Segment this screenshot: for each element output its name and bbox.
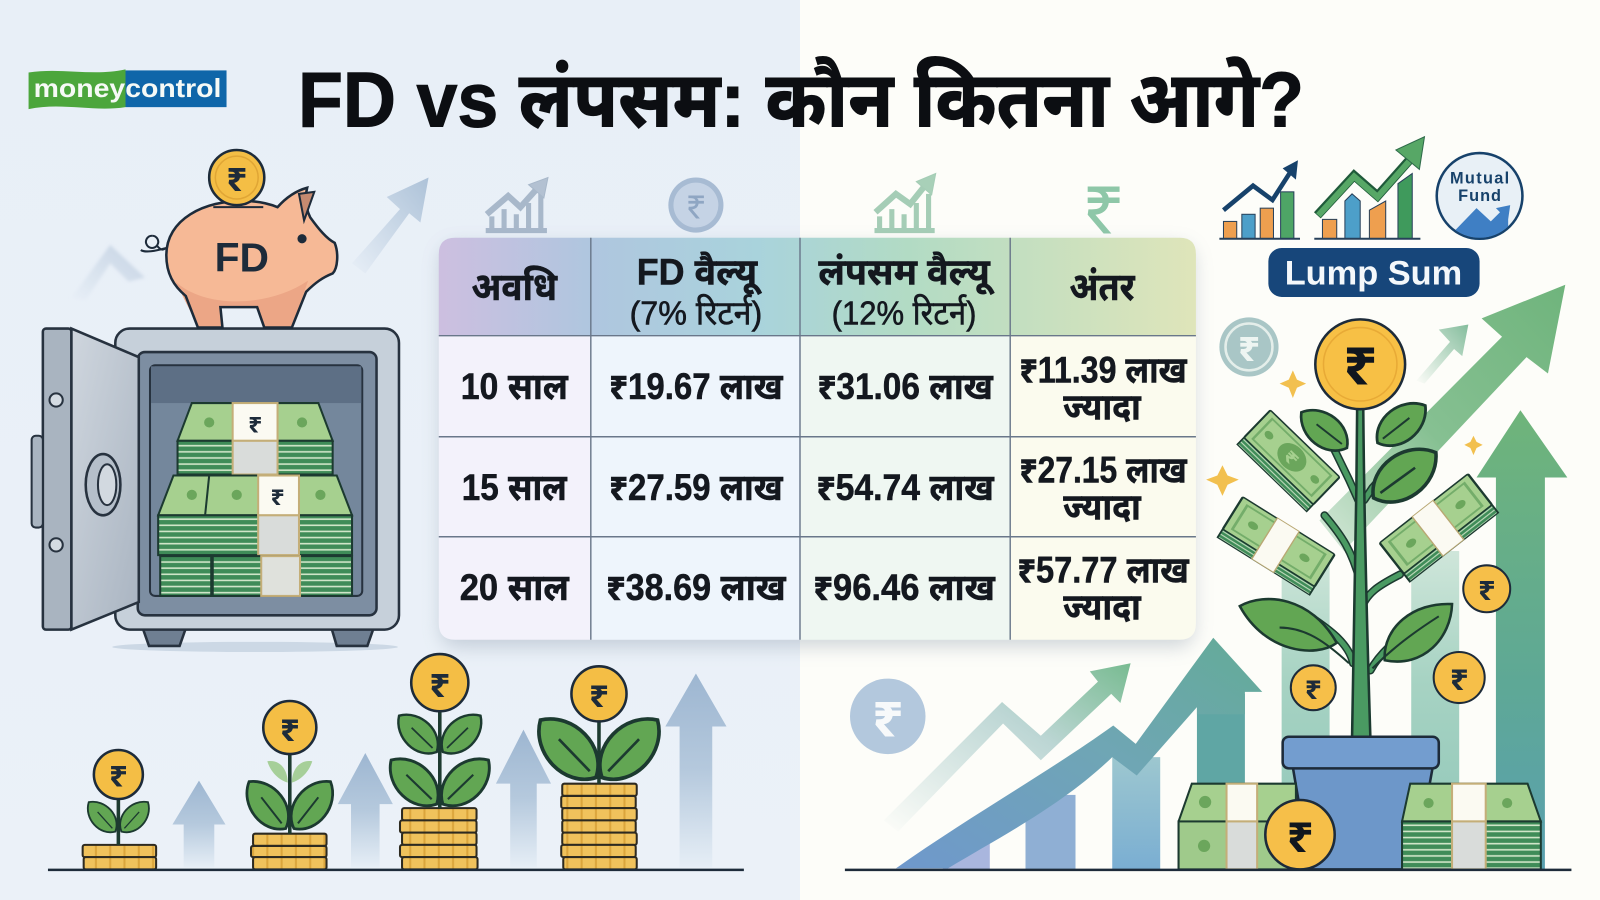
plant 3: coins and plant: ₹	[429, 664, 450, 705]
icon: faint chart FD column	[486, 178, 548, 231]
growth arrows left	[172, 673, 727, 867]
arrow: small diagonal	[1416, 324, 1468, 384]
small rupee coins: ₹	[1287, 810, 1313, 862]
header labels	[471, 251, 1135, 332]
header labels: अवधि	[471, 265, 558, 309]
logo: moneycontrol: moneycontrol	[34, 75, 221, 103]
baseline right	[845, 869, 1571, 871]
table header row	[439, 238, 1196, 336]
arrow: large diagonal	[1319, 285, 1565, 551]
row: 20 years: ज्यादा	[1063, 586, 1142, 627]
illustration: money plant	[1179, 319, 1541, 869]
table	[439, 238, 1196, 647]
header labels: FD वैल्यू	[637, 251, 762, 295]
icon: mutual fund badge: Mutual	[1450, 170, 1509, 188]
background: left FD panel	[0, 0, 800, 900]
icon: chart with navy arrow	[1219, 160, 1300, 239]
arrow: main zigzag growth	[896, 638, 1262, 868]
plant 1: coins and small plant	[81, 750, 156, 869]
header labels: (12% रिटर्न)	[832, 293, 977, 332]
plant leaves	[1291, 400, 1357, 461]
icon: pale rupee coin lower right	[850, 679, 926, 754]
row: 15 years	[462, 450, 1187, 527]
header labels: लंपसम वैल्यू	[818, 251, 995, 295]
plant stem and branches	[1311, 434, 1416, 670]
plant 2: coins and plant: ₹	[280, 711, 300, 749]
icon: faint rupee symbol: ₹	[1082, 167, 1124, 251]
icon: chart with green arrow	[1314, 137, 1424, 239]
plant 2: coins and plant	[236, 701, 344, 869]
row: 15 years: 15 साल	[462, 467, 568, 508]
small rupee coins: ₹	[1305, 673, 1322, 706]
left background arrows	[71, 178, 429, 300]
small rupee coins: ₹	[1478, 573, 1495, 607]
header labels: (7% रिटर्न)	[630, 293, 762, 332]
plant 3: coins and plant	[379, 654, 501, 869]
background: right lump sum panel	[800, 0, 1600, 900]
baseline left	[48, 869, 744, 871]
chart: background bars	[943, 551, 1459, 869]
safe door	[32, 329, 139, 630]
big rupee coin on plant	[1315, 319, 1405, 409]
icon: coin above piggy: ₹	[226, 158, 247, 199]
row: 20 years: ₹38.69 लाख	[606, 567, 786, 608]
table shadow	[441, 245, 1194, 647]
illustration: money plant: ₹	[1343, 331, 1377, 398]
pot	[1283, 737, 1439, 869]
row: 15 years: ₹27.59 लाख	[609, 467, 783, 508]
row: 10 years: ₹19.67 लाख	[609, 366, 783, 407]
arrow: faint zigzag	[884, 663, 1131, 832]
cash stack right	[1402, 784, 1541, 869]
icon: faint rupee coin	[668, 178, 723, 233]
row: 20 years	[460, 550, 1190, 627]
row: 10 years: 10 साल	[461, 366, 569, 407]
safe body	[115, 329, 399, 630]
plant 4: coins and plant: ₹	[589, 677, 609, 715]
row: 20 years: 20 साल	[460, 567, 570, 608]
row: 10 years: ज्यादा	[1063, 386, 1142, 427]
small rupee coins: ₹	[1450, 660, 1469, 697]
icon: ghost rupee coin	[1219, 317, 1279, 377]
illustration: safe: ₹	[248, 412, 262, 439]
icon: mutual fund badge: Fund	[1458, 187, 1501, 205]
label: Lump Sum: Lump Sum	[1285, 255, 1462, 293]
row: 15 years: ₹54.74 लाख	[816, 467, 995, 508]
header labels: अंतर	[1069, 266, 1135, 309]
icon: faint chart lump sum column	[874, 173, 936, 231]
small rupee coins	[1265, 565, 1510, 869]
logo: moneycontrol	[29, 69, 227, 109]
safe shadow	[112, 642, 398, 652]
illustration: safe: ₹	[271, 484, 285, 511]
arrow: large up arrow	[1477, 410, 1567, 869]
row: 10 years: ₹31.06 लाख	[817, 366, 994, 407]
label: Lump Sum	[1268, 248, 1480, 297]
row: 20 years: ₹57.77 लाख	[1017, 550, 1190, 591]
cash bundles in safe	[158, 403, 352, 596]
table body cells	[439, 336, 1196, 640]
icon: ghost rupee coin: ₹	[1238, 327, 1260, 370]
icon: mutual fund badge	[1437, 153, 1522, 239]
icon: coin above piggy	[209, 150, 264, 205]
row: 15 years: ज्यादा	[1063, 486, 1142, 527]
plant 4: coins and plant	[524, 666, 674, 869]
row: 10 years	[461, 350, 1187, 427]
row: 15 years: ₹27.15 लाख	[1019, 450, 1187, 491]
illustration: piggy bank	[141, 188, 337, 328]
cash stack left	[1179, 784, 1296, 869]
icon: faint rupee coin: ₹	[686, 185, 706, 226]
sparkles	[1206, 370, 1483, 496]
cash bundles on plant	[1237, 410, 1340, 511]
row: 20 years: ₹96.46 लाख	[813, 567, 996, 608]
row: 10 years: ₹11.39 लाख	[1019, 350, 1187, 391]
plant 1: coins and small plant: ₹	[109, 757, 128, 794]
icon: pale rupee coin lower right: ₹	[872, 687, 904, 749]
illustration: safe	[32, 329, 399, 652]
title: FD vs लंपसम: कौन कितना आगे?	[298, 58, 1304, 144]
illustration: piggy bank: FD	[215, 234, 269, 280]
safe feet	[143, 629, 373, 646]
table lines	[439, 238, 1196, 640]
